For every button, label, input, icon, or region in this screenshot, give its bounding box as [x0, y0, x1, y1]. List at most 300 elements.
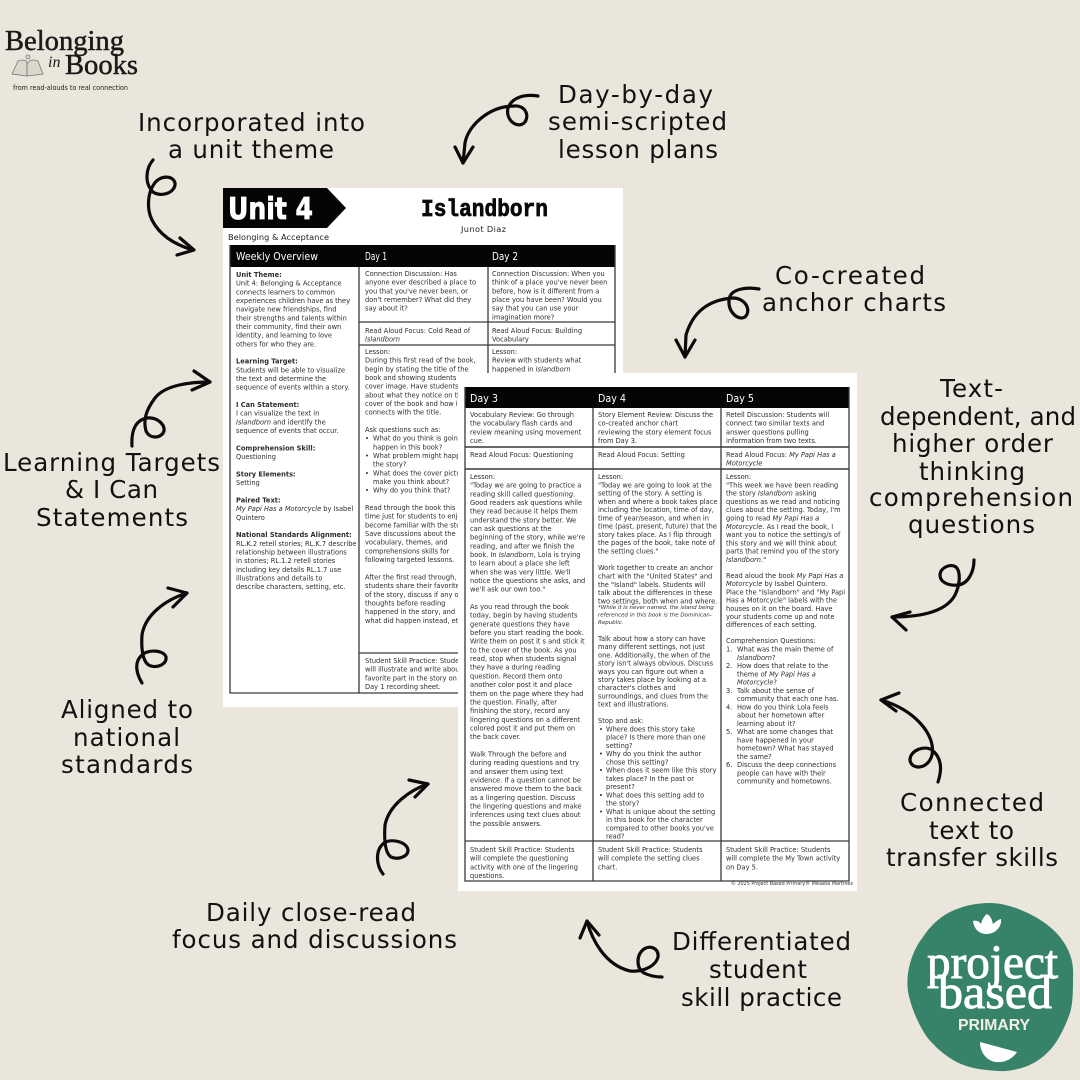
column: day 5 text: Retell Discussion: Students will	[726, 411, 829, 419]
column: day 5 text: 5.	[726, 728, 732, 736]
column: weekly overview text: their strengths and talents within	[236, 314, 347, 322]
column: day 3 text: Lesson:	[470, 473, 495, 481]
column: weekly overview text: describe characters, setting, etc.	[236, 583, 346, 591]
column: day 5 text: My Papi Has a	[797, 572, 843, 580]
column: day 1 text	[365, 270, 480, 691]
column: day 5 text: your students come up and note	[726, 613, 834, 621]
table header: overview: Day 2	[492, 251, 518, 263]
column: day 4 text: •	[599, 725, 603, 733]
column: day 4 text: surroundings, and clues from the	[598, 692, 708, 700]
column: day 2 text: Review with students what	[492, 357, 582, 365]
column: day 3 text: we'll ask our own too."	[470, 586, 545, 594]
column: day 4 text: takes place? In the past or	[606, 775, 694, 783]
column: day 4 text: talk about the differences in these	[598, 589, 712, 597]
column: day 4 text: Why do you think the author	[606, 750, 702, 758]
column: weekly overview text: experiences children have as they	[236, 297, 350, 305]
column: day 5 text: My Papi Has a	[789, 451, 836, 459]
column: day 1 text: students share their favorite part	[365, 582, 476, 590]
callout: Incorporated into a unit theme: a unit theme	[168, 135, 334, 164]
column: weekly overview text: including key details RL.1.7 use	[236, 566, 341, 574]
column: day 3 text: evidence. If a question cannot be	[470, 776, 581, 784]
column: day 4 text: What is unique about the setting	[606, 808, 715, 816]
column: day 5 text: clues about the setting. Today, I'm	[726, 506, 841, 514]
logo: Project Based Primary: project	[927, 936, 1059, 989]
column: day 4 text: from Day 3.	[598, 437, 637, 445]
logo: Project Based Primary: based	[938, 966, 1052, 1019]
column: day 5 text: 1.	[726, 646, 732, 654]
callout: Learning Targets and I Can Statements: & I Can	[65, 475, 158, 504]
column: day 5 text: "This week we have been reading	[726, 481, 838, 489]
callout: Differentiated student skill practice: student	[709, 955, 807, 984]
logo: Belonging in Books: from read-alouds to real connection	[13, 84, 128, 92]
column: day 3 text: questioning.	[534, 490, 575, 498]
column: day 1 text: Save discussions about the	[365, 530, 456, 538]
arrow: close-read	[378, 780, 428, 874]
column: day 1 text: cover of the book and how it	[365, 400, 461, 408]
table header: overview	[230, 245, 615, 267]
column: day 1 text: become familiar with the story.	[365, 521, 468, 529]
column: day 3 text: answered move them to the back	[470, 785, 582, 793]
column: day 4 text: •	[599, 808, 603, 816]
column: day 5 text: ."	[761, 556, 766, 564]
column: weekly overview text: others for who they are.	[236, 340, 316, 348]
column: day 1 text: comprehensions skills for	[365, 547, 450, 555]
callout: Aligned to national standards	[61, 695, 193, 779]
callout: Day-by-day lesson plans	[548, 80, 727, 164]
column: day 3 text: cue.	[470, 437, 484, 445]
column: weekly overview text: and identify the	[271, 418, 326, 426]
column: day 4 text: Republic.	[598, 620, 624, 626]
column: day 1 text: you that you've never been, or	[365, 287, 468, 295]
column: day 4 text: setting?	[606, 742, 633, 750]
callout: Daily close-read focus and discussions	[172, 898, 457, 954]
column: day 2 text: Islandborn	[536, 365, 571, 373]
column: day 3 text: them on the page where they had	[470, 690, 584, 698]
column: day 4 text: text and illustrations.	[598, 701, 669, 709]
column: day 4 text: Read Aloud Focus: Setting	[598, 451, 685, 459]
column: day 5 text: My Papi Has a	[769, 670, 816, 678]
column: day 5 text: will complete the My Town activity	[726, 855, 840, 863]
column: day 4 text: place? Is there more than one	[606, 734, 706, 742]
unit subtitle: Belonging & Acceptance	[228, 232, 329, 242]
callout: Day-by-day lesson plans: semi-scripted	[548, 107, 727, 136]
column: day 4 text: When does it seem like this story	[606, 767, 716, 775]
column: day 1 text: book and showing students the	[365, 374, 469, 382]
column: day 4 text: including the location, time of day,	[598, 506, 714, 514]
column: day 5 text: connect two similar texts and	[726, 420, 824, 428]
column: day 5 text: Place the "Islandborn" and "My Papi	[726, 588, 845, 596]
column: day 5 text: . As I read the book, I	[762, 523, 833, 531]
callout: Aligned to national standards: national	[73, 723, 180, 752]
column: day 3 text: understand the story better. We	[470, 516, 576, 524]
column: day 4 text: two settings, both when and where.	[598, 597, 717, 605]
callout: Learning Targets and I Can Statements: Learning Targets	[3, 448, 220, 477]
table header: days: Day 3	[470, 393, 498, 405]
column: weekly overview text: Quintero	[236, 514, 265, 522]
column: day 1 text: make you think about?	[373, 478, 450, 486]
worksheet page 2: Days 3 to 5	[458, 373, 857, 891]
column: day 2 text: say that you can use your	[492, 305, 579, 313]
callout: Incorporated into a unit theme	[138, 108, 365, 164]
column: day 4 text: Student Skill Practice: Students	[598, 846, 703, 854]
callout: Day-by-day lesson plans: Day-by-day	[558, 80, 713, 109]
column: day 5 text: want you to notice the setting/s of	[726, 531, 841, 539]
column: day 3 text: beginning of the story, while we're	[470, 534, 585, 542]
column: day 5 text: Lesson:	[726, 473, 751, 481]
arrow: transfer skills	[881, 693, 940, 782]
column: day 3 text: reading, and after we finish the	[470, 542, 574, 550]
column: weekly overview text: their community, find their own	[236, 323, 341, 331]
column: weekly overview text: Paired Text:	[236, 496, 281, 504]
column: day 5 text: ?	[773, 679, 777, 687]
column: day 1 text: connects with the title.	[365, 409, 441, 417]
column: day 3 text: inferences using text clues about	[470, 811, 581, 819]
column: day 3 text: generate questions they have	[470, 620, 570, 628]
callout: Day-by-day lesson plans: lesson plans	[558, 135, 718, 164]
callout: Learning Targets and I Can Statements: Statements	[36, 503, 188, 532]
table header: overview: Weekly Overview	[236, 251, 318, 263]
column: day 4 text: compared to other books you've	[606, 824, 714, 832]
callout: Text-dependent questions	[869, 374, 1076, 539]
column: day 3 text: reading skill called	[470, 490, 534, 498]
column: day 3 text: activity with one of the lingering	[470, 863, 578, 871]
column: day 3 text	[470, 411, 585, 880]
callout: Differentiated student skill practice	[672, 927, 851, 1012]
arrow: national standards	[137, 588, 187, 683]
column: day 2 text: Read Aloud Focus: Building	[492, 327, 582, 335]
column: day 4 text: Story Element Review: Discuss the	[598, 411, 713, 419]
column: day 4 text: Talk about how a story can have	[597, 635, 705, 643]
column: day 3 text: the back cover.	[470, 733, 521, 741]
column: day 3 text: colored post it and put them on	[470, 724, 575, 732]
column: day 3 text: questions.	[470, 872, 504, 880]
column: day 5 text: How do you think Lola feels	[737, 703, 829, 711]
column: day 5 text: Student Skill Practice: Students	[726, 846, 831, 854]
column: weekly overview text: connects learners to common	[236, 288, 335, 296]
column: day 1 text: •	[365, 452, 369, 460]
column: day 5 text: parts that remind you of the story	[726, 548, 839, 556]
column: day 3 text: read, stop when students signal	[470, 655, 576, 663]
column: day 1 text: favorite part in the story on the	[365, 674, 470, 682]
column: weekly overview text: I can visualize the text in	[236, 410, 319, 418]
column: day 5 text: community and hometowns.	[737, 778, 832, 786]
callout: Co-created anchor charts: anchor charts	[762, 288, 946, 317]
column: day 3 text: to the cover of the book. As you	[470, 646, 577, 654]
column: day 5 text: Motorcycle	[726, 580, 762, 588]
column: day 5 text: What are some changes that	[737, 728, 833, 736]
callout: Text-dependent questions: comprehension	[869, 483, 1073, 512]
column: weekly overview text: Unit 4: Belonging & Acceptance	[236, 280, 342, 288]
column: day 5 text: 4.	[726, 703, 732, 711]
column: day 5 text: My Papi Has a	[773, 514, 819, 522]
column: day 4 text: Stop and ask:	[598, 717, 643, 725]
callout: Co-created anchor charts	[762, 261, 946, 317]
column: day 3 text: Write them on post it s and stick it	[470, 638, 585, 646]
column: weekly overview text: relationship between illustrations	[236, 548, 347, 556]
column: day 4 text: chart.	[598, 863, 617, 871]
icon: open book bowl	[980, 1042, 1017, 1062]
column: day 4 text: present?	[606, 783, 635, 791]
column: day 2 text: Vocabulary	[492, 336, 529, 344]
column: weekly overview text: identity, and learning to love	[236, 332, 332, 340]
column: day 3 text: book. In	[470, 551, 499, 559]
column: weekly overview text: Setting	[236, 479, 260, 487]
column: day 5 text	[726, 411, 845, 871]
column: day 5 text: Read Aloud Focus:	[726, 451, 789, 459]
callout: Text-dependent questions: questions	[908, 510, 1035, 539]
column: day 1 text: anyone ever described a place to	[365, 279, 476, 287]
logo: Belonging in Books: Books	[65, 50, 138, 81]
column: day 5 text: Islandborn	[726, 556, 761, 564]
arrow: comprehension questions	[892, 560, 974, 630]
column: day 3 text: before you start reading the book.	[470, 629, 584, 637]
column: weekly overview text: the text and determine the	[236, 375, 326, 383]
column: weekly overview text: sequence of events within a story.	[236, 384, 350, 392]
book title: Islandborn	[421, 197, 548, 224]
column: day 5 text: Discuss the deep connections	[737, 761, 837, 769]
column: day 3 text: lingering questions on a different	[470, 716, 581, 724]
column: day 1 text: •	[365, 435, 369, 443]
arrow: skill practice	[580, 921, 662, 977]
column: day 1 text: What does the cover picture	[373, 469, 467, 477]
column: day 2 text: place you have been? Would you	[492, 296, 602, 304]
column: day 5 text: answer questions pulling	[726, 428, 809, 436]
table header: days: Day 5	[726, 393, 754, 405]
column: day 5 text: 3.	[726, 687, 732, 695]
column: day 4 text: chart with the "United States" and	[598, 572, 712, 580]
column: day 3 text: the possible answers.	[470, 820, 542, 828]
column: weekly overview text: by Isabel	[321, 505, 353, 513]
callout: Connected text to transfer skills: transfer skills	[886, 843, 1058, 872]
column: day 3 text: to learn about a place she left	[470, 560, 570, 568]
column: day 1 text: vocabulary, themes, and	[365, 539, 448, 547]
column: day 4 text: character's clothes and	[598, 684, 676, 692]
table header: days	[465, 387, 849, 408]
column: day 3 text: during reading questions and try	[470, 759, 579, 767]
callout: Aligned to national standards: Aligned to	[61, 695, 193, 724]
column: day 4 text: story isn't always obvious. Discuss	[598, 660, 714, 668]
column: weekly overview text: Unit Theme:	[236, 271, 282, 279]
column: day 3 text: can ask questions at the	[470, 525, 551, 533]
column: day 4 text: one. Additionally, the when of the	[598, 651, 710, 659]
column: day 4 text: ways you can figure out when a	[598, 668, 704, 676]
column: day 3 text: and answer them using text	[470, 768, 564, 776]
column: day 1 text: happen in this book?	[373, 443, 443, 451]
column: day 3 text: today, begin by having students	[470, 612, 578, 620]
column: day 5 text: ?	[772, 654, 776, 662]
column: day 4 text: the "Island" labels. Students will	[598, 581, 706, 589]
column: day 5 text: people can have with their	[737, 769, 826, 777]
column: day 3 text: finishing the story, record any	[470, 707, 570, 715]
logo: Belonging in Books: in	[48, 54, 60, 71]
column: day 1 text: What do you think is going to	[373, 435, 471, 443]
callout: Daily close-read focus and discussions: focus and discussions	[172, 925, 457, 954]
column: day 1 text: After the first read through, have	[365, 573, 475, 581]
column: day 5 text: going to read	[726, 514, 773, 522]
column: day 4 text: co-created anchor chart	[598, 420, 678, 428]
column: weekly overview text: navigate new friendships, find	[236, 306, 336, 314]
column: day 4 text: story takes place. As I flip through	[598, 531, 712, 539]
column: day 5 text: Motorcycle	[726, 460, 762, 468]
column: day 5 text: hometown? What has stayed	[737, 745, 834, 753]
column: day 4 text: time of year/season, and when in	[598, 514, 709, 522]
column: day 4 text: read?	[606, 833, 625, 841]
column: day 1 text: cover image. Have students think	[365, 383, 477, 391]
column: day 1 text: Student Skill Practice: Students	[365, 657, 470, 665]
column: day 3 text: Read Aloud Focus: Questioning	[470, 451, 573, 459]
callout: Text-dependent questions: dependent, and	[880, 402, 1076, 431]
column: day 4 text: chose this setting?	[606, 758, 669, 766]
column: day 1 text: Why do you think that?	[373, 487, 451, 495]
column: day 1 text: Islandborn	[365, 336, 400, 344]
column: day 5 text: houses on it on the board. Have	[726, 605, 832, 613]
column: day 1 text: of the story, discuss if any of their	[365, 591, 479, 599]
column: day 5 text: questions as we read and noticing	[726, 498, 840, 506]
column: weekly overview text: sequence of events that occur.	[236, 427, 339, 435]
column: weekly overview text: National Standards Alignment:	[236, 531, 352, 539]
callout: Text-dependent questions: higher order	[892, 429, 1054, 458]
column: weekly overview text: Questioning	[236, 453, 276, 461]
column: day 4 text: Lesson:	[598, 473, 623, 481]
column: day 4 text: •	[599, 767, 603, 775]
column: day 4 text: the pages of the book, take note of	[598, 539, 716, 547]
column: day 5 text: community that each one has.	[737, 695, 839, 703]
column: day 2 text: before, how is it different from a	[492, 287, 599, 295]
column: day 3 text: they have a during reading	[470, 664, 560, 672]
callout: Incorporated into a unit theme: Incorporated into	[138, 108, 365, 137]
column: day 3 text: Walk Through the before and	[470, 750, 567, 758]
column: day 1 text: the story?	[373, 461, 407, 469]
arrow: lesson plans	[455, 95, 538, 163]
column: day 5 text: Has a Motorcycle" labels with the	[726, 597, 837, 605]
column: day 4 text: referenced in this book is the Dominican-	[598, 612, 712, 618]
column: day 1 text: During this first read of the book,	[365, 357, 476, 365]
column: day 1 text: time just for students to enjoy and	[365, 513, 480, 521]
column: day 5 text: How does that relate to the	[737, 662, 828, 670]
column: day 5 text: 2.	[726, 662, 732, 670]
column: weekly overview text: Comprehension Skill:	[236, 444, 315, 452]
column: weekly overview text: Islandborn	[236, 418, 271, 426]
column: day 1 text: say about it?	[365, 305, 408, 313]
column: day 4 text: in this book for the character	[606, 816, 703, 824]
column: day 3 text: Student Skill Practice: Students	[470, 846, 575, 854]
arrow: learning targets	[132, 371, 210, 446]
column: day 2 text: imagination more?	[492, 313, 555, 321]
column: day 5 text: information from two texts.	[726, 437, 817, 445]
column: day 1 text: what did happen instead, etc.	[365, 617, 464, 625]
column: day 4 text: the setting clues."	[598, 547, 659, 555]
column: day 1 text: Read through the book this	[365, 504, 456, 512]
column: day 1 text: What problem might happen in	[373, 452, 477, 460]
column: day 4 text: •	[599, 750, 603, 758]
column: day 5 text: Motorcycle	[737, 679, 773, 687]
column: day 5 text: by Isabel Quintero.	[762, 580, 827, 588]
callout: Differentiated student skill practice: skill practice	[681, 983, 842, 1012]
icon: open book	[12, 55, 43, 76]
column: day 1 text: •	[365, 487, 369, 495]
column: day 4 text: time (past, present, future) that the	[598, 523, 717, 531]
column: day 1 text: about what they notice on the	[365, 391, 465, 399]
column: day 4 text: •	[599, 791, 603, 799]
column: day 3 text: the question. Finally, after	[470, 698, 557, 706]
table header: days: Day 4	[598, 393, 626, 405]
column: day 3 text: the lingering questions and make	[470, 802, 581, 810]
copyright line: © 2025 Project Based Primary® Mikaela Martinez	[731, 880, 853, 887]
column: day 1 text: don't remember? What did they	[365, 296, 471, 304]
column: day 3 text: As you read through the book	[470, 603, 569, 611]
unit banner: Unit 4	[228, 192, 313, 227]
column: day 2 text: Connection Discussion: When you	[492, 270, 605, 278]
column: day 4 text: "Today we are going to look at the	[598, 481, 712, 489]
column: day 4 text: *While it is never named, the island being	[598, 605, 714, 611]
column: day 1 text: will illustrate and write about their	[365, 666, 480, 674]
callout: Learning Targets and I Can Statements	[3, 448, 220, 532]
table header: overview: Day 1	[365, 251, 387, 263]
column: day 5 text: Read aloud the book	[726, 572, 797, 580]
column: day 5 text: What was the main theme of	[737, 646, 834, 654]
arrow: anchor charts	[676, 288, 759, 357]
column: day 3 text: question. Record them onto	[470, 672, 562, 680]
column: day 5 text: learning about it?	[737, 720, 796, 728]
callout: Connected text to transfer skills: text to	[929, 816, 1014, 845]
column: day 5 text: Islandborn	[737, 654, 772, 662]
callout: Co-created anchor charts: Co-created	[775, 261, 925, 290]
logo: Belonging in Books: Belonging	[5, 26, 124, 57]
column: day 2 text	[492, 270, 607, 373]
callout: Daily close-read focus and discussions: Daily close-read	[206, 898, 416, 927]
column: day 5 text: Comprehension Questions:	[726, 637, 816, 645]
callout: Differentiated student skill practice: Differentiated	[672, 927, 851, 956]
column: day 5 text: Motorcycle	[726, 523, 762, 531]
column: day 3 text: Islandborn, Lola is trying	[499, 551, 581, 559]
column: day 5 text: about her hometown after	[737, 712, 825, 720]
column: day 3 text: as a lingering question. Discuss	[470, 794, 576, 802]
column: day 4 text: setting of the story. A setting is	[598, 490, 702, 498]
column: day 3 text: Vocabulary Review: Go through	[470, 411, 574, 419]
column: day 1 text: Read Aloud Focus: Cold Read of	[365, 327, 471, 335]
column: day 4 text: the story?	[606, 800, 640, 808]
column: day 4 text: story takes place by looking at a	[598, 676, 706, 684]
column: day 5 text: Islandborn asking	[758, 490, 817, 498]
logo: Project Based Primary	[907, 903, 1073, 1071]
column: day 4 text: many different settings, not just	[598, 643, 705, 651]
column: weekly overview text: RL.K.2 retell stories; RL.K.7 describe	[236, 540, 356, 548]
column: day 1 text: thoughts before reading	[365, 599, 445, 607]
column: day 5 text: Talk about the sense of	[736, 687, 815, 695]
column: day 4 text: Where does this story take	[606, 725, 695, 733]
column: day 3 text: another color post it and place	[470, 681, 572, 689]
worksheet page 1: Unit 4 weekly overview	[223, 188, 623, 707]
column: weekly overview text: in stories; RL.1.2 retell stories	[236, 557, 336, 565]
column: day 1 text: happened in the story, and	[365, 608, 455, 616]
column: weekly overview text: illustrations and details to	[236, 574, 322, 582]
column: weekly overview text: Learning Target:	[236, 358, 298, 366]
callout: Aligned to national standards: standards	[61, 750, 193, 779]
column: day 1 text: following targeted lessons.	[365, 556, 454, 564]
column: weekly overview text: My Papi Has a Motorcycle	[236, 505, 321, 513]
column: weekly overview text: Story Elements:	[236, 470, 296, 478]
column: day 4 text: will complete the setting clues	[598, 855, 700, 863]
logo: Belonging in Books	[5, 26, 138, 92]
column: day 4 text: when and where a book takes place	[598, 498, 717, 506]
column: day 5 text: 6.	[726, 761, 732, 769]
column: day 4 text	[597, 411, 717, 871]
column: weekly overview text: Students will be able to visualize	[236, 366, 345, 374]
column: day 4 text: Work together to create an anchor	[598, 564, 713, 572]
column: day 1 text: Day 1 recording sheet.	[365, 683, 441, 691]
column: day 5 text: differences of each setting.	[726, 621, 817, 629]
column: day 5 text: on Day 5.	[726, 863, 758, 871]
